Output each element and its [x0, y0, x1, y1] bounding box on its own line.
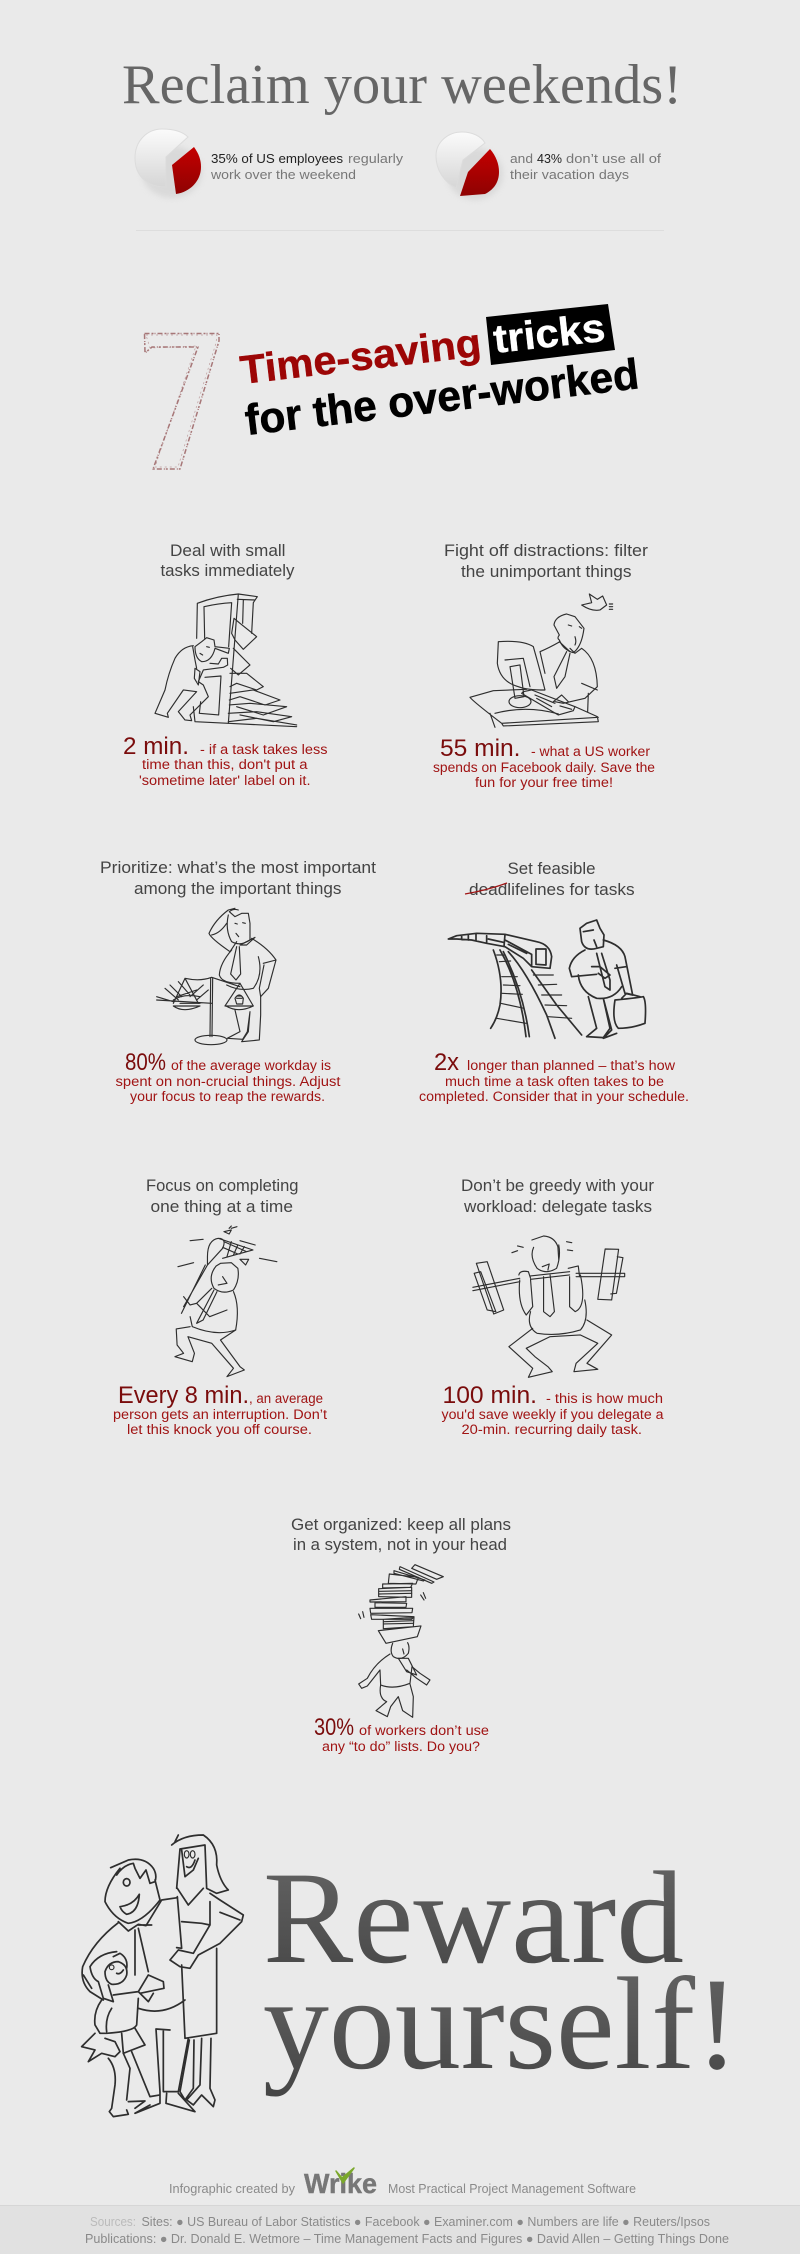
heading: don't be greedy: Don’t be greedy with your [461, 1176, 654, 1195]
heading: deal with small tasks: tasks immediately [160, 561, 295, 580]
stat: 100 min: 100 min. [442, 1382, 537, 1409]
stat: 100 min: you'd save weekly if you delegate a [442, 1407, 664, 1422]
stat: 55 min: spends on Facebook daily. Save the [433, 760, 655, 775]
illustration: man weighing vegetables and cupcake on scale [157, 908, 276, 1045]
heading: get organized: Get organized: keep all plans [291, 1515, 511, 1534]
panel: weekend statistic [135, 129, 404, 198]
stat: 2 min [123, 733, 328, 788]
text: 43% vacation days: and [510, 151, 533, 166]
heading: deal with small tasks: Deal with small [170, 541, 286, 560]
heading: fight off distractions: Fight off distractions: filter [444, 541, 648, 560]
stat: 30% [314, 1714, 489, 1754]
icon: pie chart 43% [436, 132, 503, 200]
illustration: man at computer distracted by bird [470, 594, 613, 727]
heading: reward yourself: Reward [263, 1844, 684, 1991]
stat: 30%: of workers don’t use [359, 1723, 489, 1738]
stat: 55 min: fun for your free time! [475, 775, 613, 790]
footer: credits: Most Practical Project Management Software [388, 2182, 636, 2196]
footer: sources band: Publications: ● Dr. Donald E. Wetmore – Time Management Facts and Figures ● David Allen – Getting Things Done [85, 2232, 729, 2246]
title: Reclaim your weekends! [122, 54, 682, 116]
stat: 30%: 30% [314, 1714, 354, 1741]
heading: set feasible lifelines [465, 859, 635, 899]
text: 43% vacation days [510, 151, 661, 182]
footer: credits [169, 2168, 636, 2199]
stat: 2 min: 'sometime later' label on it. [139, 773, 310, 788]
text: 43% vacation days: their vacation days [510, 167, 630, 182]
panel: tip 2 distractions [433, 541, 655, 790]
illustration: man holding door against papers [155, 594, 297, 727]
stat: every 8 min: let this knock you off course. [127, 1422, 312, 1437]
heading: get organized: in a system, not in your head [293, 1535, 507, 1554]
heading: focus on completing: one thing at a time [150, 1197, 293, 1216]
text: 43% vacation days: 43% [537, 151, 562, 166]
stat: every 8 min: person gets an interruption. Don’t [113, 1407, 327, 1422]
stat: 80% [116, 1049, 341, 1104]
text: 35% of US employees: regularly [348, 151, 404, 166]
heading line: Time-saving: Time-saving [238, 321, 483, 393]
heading: fight off distractions [444, 541, 648, 581]
footer: sources band: Sources: [90, 2215, 136, 2229]
icon: pie chart 35% [135, 129, 202, 198]
illustration: man lifting barbell [473, 1236, 625, 1377]
heading: time-saving tricks for the over-worked [238, 304, 641, 445]
stat: 55 min: - what a US worker [531, 744, 651, 759]
stat: 55 min: 55 min. [440, 735, 520, 762]
stat: 80%: 80% [125, 1049, 166, 1076]
heading: fight off distractions: the unimportant things [461, 562, 632, 581]
stat: 100 min: - this is how much [546, 1391, 663, 1406]
heading numeral: 7 [144, 334, 219, 469]
stat: 100 min [442, 1382, 664, 1437]
heading: don't be greedy: workload: delegate tasks [463, 1197, 652, 1216]
badge: tricks: tricks [491, 306, 607, 362]
heading: set feasible lifelines: Set feasible [508, 859, 596, 878]
stat: 2 min: 2 min. [123, 733, 189, 760]
stat: 2x: completed. Consider that in your schedule. [419, 1089, 689, 1104]
heading: prioritize: among the important things [134, 879, 342, 898]
heading: prioritize [100, 858, 376, 898]
panel: tip 1 small tasks [123, 541, 328, 788]
illustration: happy family [82, 1835, 243, 2117]
illustration: man balancing stack of books [359, 1565, 443, 1717]
text: 35% of US employees: 35% of US employees [211, 151, 344, 166]
stat: 80%: spent on non-crucial things. Adjust [116, 1074, 341, 1089]
stat: 2 min: time than this, don't put a [142, 757, 308, 772]
illustration: man checking watch beside train [448, 920, 646, 1038]
stat: 2x [419, 1049, 689, 1104]
illustration: man chasing flies with net [175, 1226, 277, 1377]
stat: 2x: longer than planned – that’s how [467, 1058, 675, 1073]
heading: get organized [291, 1515, 511, 1554]
stat: every 8 min [113, 1382, 327, 1437]
text: 43% vacation days: don’t use all of [566, 151, 661, 166]
stat: 30%: any “to do” lists. Do you? [322, 1739, 480, 1754]
stat: 100 min: 20-min. recurring daily task. [462, 1422, 642, 1437]
panel: tip 7 get organized [291, 1515, 511, 1754]
stat: every 8 min: , an average [249, 1391, 323, 1406]
footer: sources band [0, 2205, 800, 2254]
text: 35% of US employees [210, 151, 404, 182]
panel: vacation statistic [436, 132, 661, 200]
logo: Wrike: Wrike [304, 2168, 377, 2199]
panel: reward yourself [82, 1835, 739, 2117]
heading: focus on completing: Focus on completing [146, 1176, 298, 1195]
heading line: for the over-worked: for the over-worked [243, 350, 641, 445]
panel: tip 5 one thing at a time [113, 1176, 327, 1437]
heading: deal with small tasks [160, 541, 295, 580]
stat: 80%: of the average workday is [171, 1058, 331, 1073]
stat: 80%: your focus to reap the rewards. [130, 1089, 325, 1104]
panel: tip 4 feasible lifelines [419, 859, 689, 1104]
heading: don't be greedy [461, 1176, 654, 1216]
heading: focus on completing [146, 1176, 298, 1216]
stat: 2x: much time a task often takes to be [445, 1074, 664, 1089]
footer: sources band: Sites: ● US Bureau of Labor Statistics ● Facebook ● Examiner.com ● Numbers are life ● Reuters/Ipsos [142, 2215, 710, 2229]
stat: 2x: 2x [434, 1049, 459, 1076]
stat: every 8 min: Every 8 min. [118, 1382, 249, 1409]
panel: tip 3 prioritize [100, 858, 376, 1104]
stat: 2 min: - if a task takes less [200, 742, 328, 757]
heading: reward yourself [263, 1844, 739, 2097]
stat: 55 min [433, 735, 655, 790]
panel: tip 6 delegate [442, 1176, 664, 1437]
heading: prioritize: Prioritize: what’s the most important [100, 858, 376, 877]
heading: set feasible lifelines: deadlifelines for tasks [469, 880, 635, 899]
text: 35% of US employees: work over the weekend [210, 167, 356, 182]
footer: credits: Infographic created by [169, 2182, 296, 2196]
heading: reward yourself: yourself! [263, 1950, 739, 2097]
